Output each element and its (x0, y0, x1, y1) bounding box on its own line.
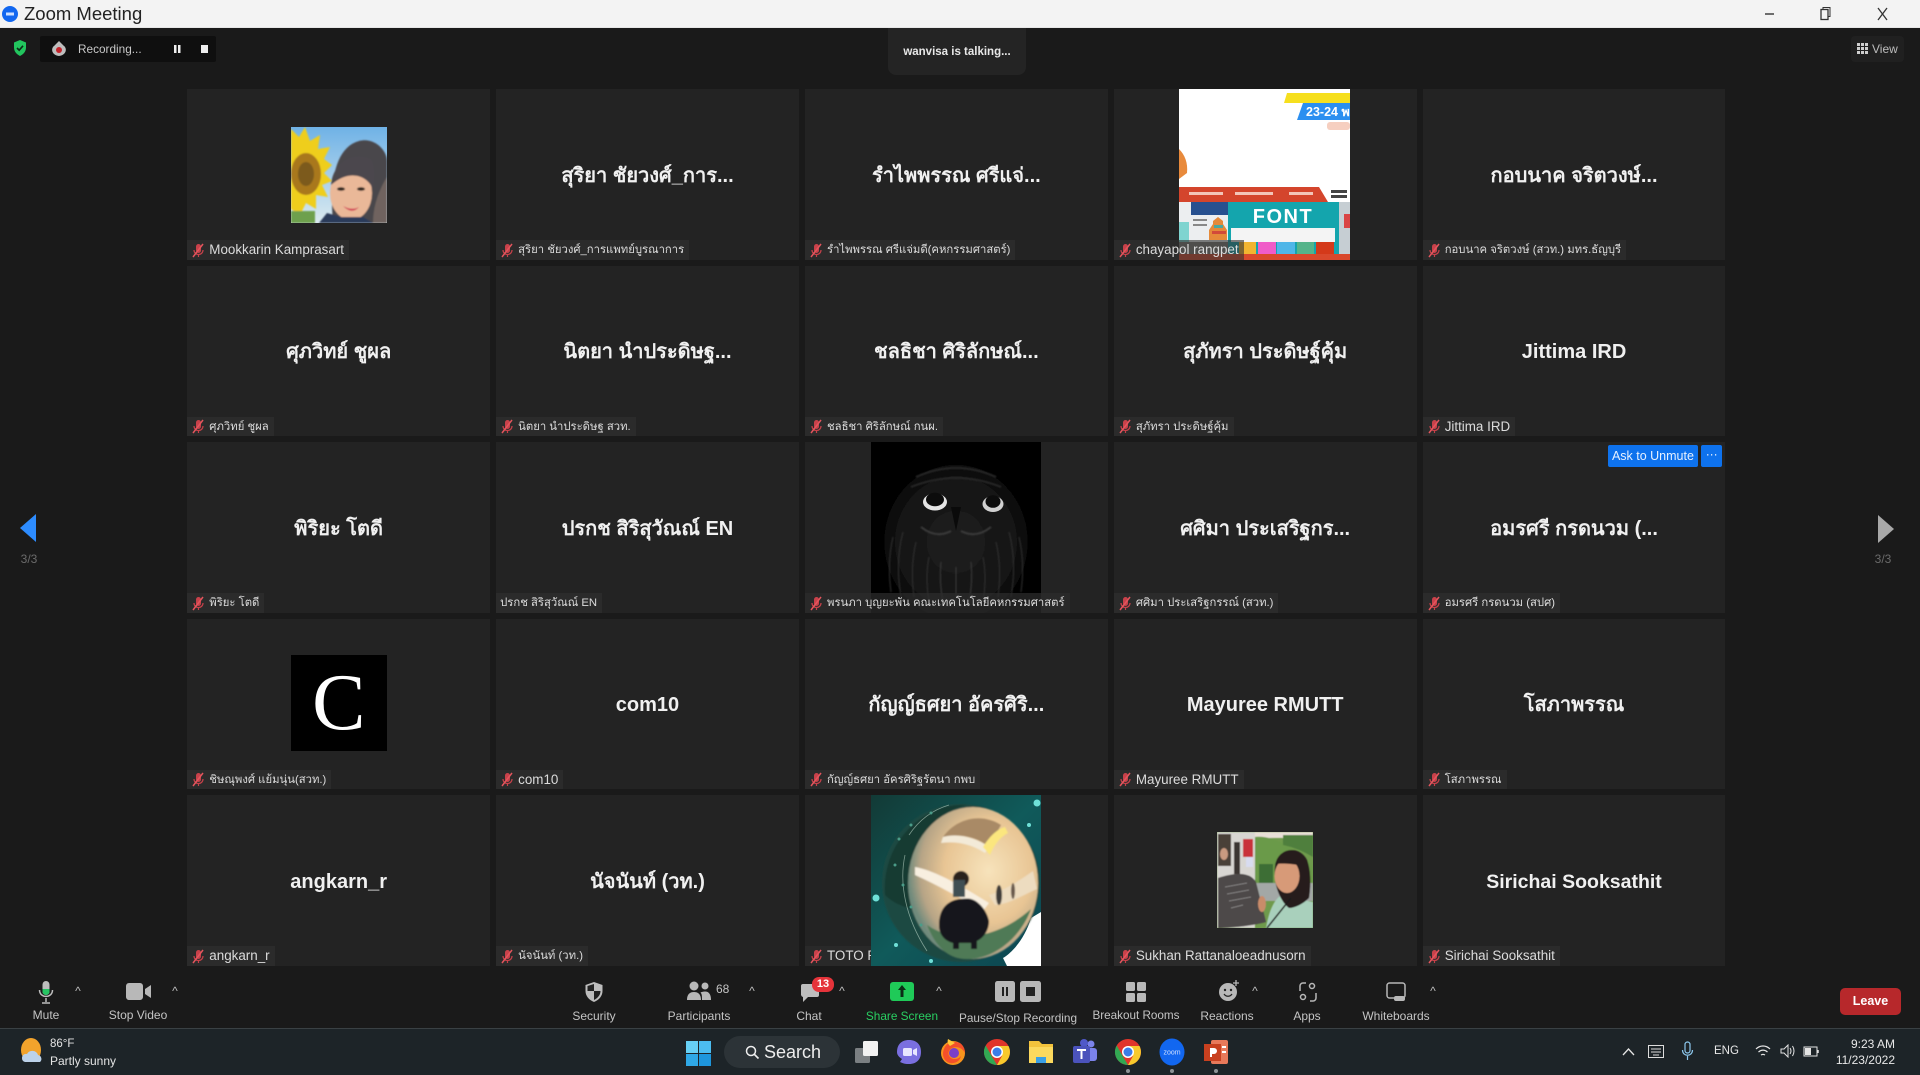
name label (1423, 240, 1626, 260)
participant tile: โสภาพรรณ (1423, 618, 1725, 789)
participant tile: ปรกช (496, 442, 799, 613)
right page count: 3/3 (1875, 552, 1891, 566)
window title: Zoom Meeting (24, 3, 142, 24)
icon: file explorer (1029, 1041, 1053, 1063)
name label (496, 770, 563, 789)
chat badge (812, 977, 834, 992)
owl photo (871, 442, 1041, 613)
name label: นัจนันท์ (วท.) (518, 950, 583, 962)
display name: โสภาพรรณ (1524, 694, 1624, 716)
name label (187, 417, 274, 436)
name label: ชลธิชา ศิริลักษณ์ กนผ. (827, 421, 938, 433)
display name: กัญญ์ธศยา อัครศิริ... (868, 694, 1044, 716)
name label (187, 770, 331, 789)
name label: พิริยะ โตดี (209, 597, 259, 609)
icon: battery (1803, 1044, 1820, 1058)
participant tile: TOTO (805, 795, 1108, 966)
icon: partly sunny (21, 1038, 42, 1062)
language: ENG (1714, 1045, 1739, 1057)
more options button (1701, 445, 1722, 467)
name label: ปรกช สิริสุวัณณ์ EN (500, 597, 597, 609)
name label (1423, 946, 1560, 966)
toolbar: participants: 68 (716, 982, 729, 996)
name label: รำไพพรรณ ศรีแจ่มดี(คหกรรมศาสตร์) (827, 244, 1010, 256)
name label (1114, 593, 1278, 613)
icon: windows start (686, 1041, 711, 1066)
toolbar: chat: Chat (796, 1008, 822, 1022)
toolbar: whiteboards: Whiteboards (1362, 1008, 1430, 1022)
toolbar: security: Security (572, 1008, 616, 1022)
participant tile: ศศิมา (1114, 442, 1417, 613)
chevron: chat options: ^ (839, 984, 845, 998)
name label: นิตยา นำประดิษฐ สวท. (518, 421, 631, 433)
title bar (0, 0, 1920, 28)
name label: Jittima IRD (1445, 419, 1510, 434)
name label: Sukhan Rattanaloeadnusorn (1136, 948, 1306, 963)
participant tile: อมรศรี (1423, 442, 1725, 613)
chevron: participants options: ^ (749, 984, 755, 998)
search box (724, 1036, 840, 1068)
display name: รำไพพรรณ ศรีแจ่... (872, 164, 1041, 186)
toolbar: pause/stop recording: Pause/Stop Recording (959, 1010, 1077, 1024)
participant tile: สุภัทรา (1114, 266, 1417, 436)
name label: Mayuree RMUTT (1136, 772, 1239, 787)
ask to unmute button (1608, 445, 1698, 467)
name label: พรนภา บุญยะพัน คณะเทคโนโลยีคหกรรมศาสตร์ (827, 597, 1065, 609)
poster image (1179, 89, 1350, 260)
name label (805, 417, 943, 436)
name label (805, 770, 980, 789)
icon: zoom running: zoom (1163, 1050, 1181, 1056)
name label (496, 417, 636, 436)
display name: นิตยา นำประดิษฐ... (563, 341, 732, 363)
icon: teams (1073, 1039, 1097, 1063)
name label: chayapol rangpet (1136, 242, 1239, 257)
name label (805, 593, 1070, 613)
participant tile: ศุภวิทย์ (187, 266, 490, 436)
participant tile: Jittima (1423, 266, 1725, 436)
name label (187, 946, 275, 966)
icon: powerpoint running (1204, 1040, 1228, 1064)
name label (1114, 417, 1234, 436)
toolbar: breakout rooms (1092, 982, 1180, 1022)
icon: zoom running (1160, 1038, 1184, 1066)
name label: สุภัทรา ประดิษฐ์คุ้ม (1136, 421, 1229, 433)
participant tile: สุริยา (496, 89, 799, 260)
icon: keyboard (1648, 1045, 1664, 1058)
name label: ศศิมา ประเสริฐกรรณ์ (สวท.) (1136, 597, 1273, 609)
toolbar: chat (796, 977, 834, 1022)
recording label: Recording... (78, 42, 142, 56)
name label (187, 593, 264, 613)
name label (1423, 770, 1507, 789)
display name: ศศิมา ประเสริฐกร... (1180, 518, 1350, 540)
icon: chrome running (1115, 1039, 1141, 1065)
participant tile: ชลธิชา (805, 266, 1108, 436)
name label (805, 946, 883, 966)
participant tile: รำไพพรรณ (805, 89, 1108, 260)
participant tile: chayapol (1114, 89, 1417, 260)
display name: ปรกช สิริสุวัณณ์ EN (562, 518, 733, 540)
display name: angkarn_r (290, 870, 387, 892)
icon: chrome (984, 1039, 1010, 1065)
display name: ศุภวิทย์ ชูผล (286, 341, 391, 363)
name label: กัญญ์ธศยา อัครศิริฐรัตนา กพบ (827, 774, 975, 786)
chat badge: 13 (817, 978, 829, 990)
display name: อมรศรี กรดนวม (... (1490, 518, 1658, 540)
display name: com10 (616, 694, 679, 716)
icon: magnifier (746, 1046, 759, 1060)
chevron: video options: ^ (172, 984, 178, 998)
left page arrow (20, 514, 36, 542)
running app dots (1126, 1069, 1174, 1073)
toolbar: stop video (109, 983, 167, 1022)
name label: กอบนาค จริตวงษ์ (สวท.) มทร.ธัญบุรี (1445, 244, 1621, 256)
toolbar: whiteboards (1362, 982, 1430, 1022)
name label (496, 946, 588, 966)
name label: อมรศรี กรดนวม (สปศ) (1445, 597, 1555, 609)
participant tile: Sukhan (1114, 795, 1417, 966)
icon: microphone (1681, 1041, 1694, 1061)
icon: recording (52, 41, 66, 56)
icon: view grid (1857, 43, 1868, 54)
name label: TOTO P. (827, 948, 878, 963)
icon: task view (855, 1041, 878, 1063)
participant tile: กอบนาค (1423, 89, 1725, 260)
right page arrow (1878, 515, 1894, 543)
toolbar: mute (33, 981, 59, 1022)
toolbar: mute: Mute (33, 1008, 59, 1022)
icon: tray chevron (1622, 1048, 1634, 1056)
name label: ชิษณุพงศ์ แย้มนุ่น(สวท.) (209, 774, 326, 786)
ask to unmute button: Ask to Unmute (1612, 449, 1694, 463)
talking indicator (888, 28, 1026, 75)
taskbar (0, 1028, 1920, 1075)
name label (187, 240, 349, 260)
name label (805, 240, 1015, 260)
search box: Search (764, 1042, 821, 1062)
toolbar: participants: Participants (668, 1008, 730, 1022)
participant tile: นิตยา (496, 266, 799, 436)
display name: สุภัทรา ประดิษฐ์คุ้ม (1183, 341, 1347, 363)
name label: Mookkarin Kamprasart (209, 242, 344, 257)
toolbar: breakout rooms: Breakout Rooms (1092, 1008, 1180, 1022)
participant tile: angkarn_r (187, 795, 490, 966)
view button (1851, 36, 1904, 62)
temperature: 86°F (50, 1038, 74, 1050)
toolbar: share screen: Share Screen (866, 1008, 938, 1022)
participant tile: นัจนันท์ (496, 795, 799, 966)
chevron: reactions options: ^ (1252, 984, 1258, 998)
name label: angkarn_r (209, 948, 270, 963)
avatar: letter C: C (312, 659, 365, 747)
clock date: 11/23/2022 (1836, 1053, 1895, 1067)
participant tile: Mayuree (1114, 618, 1417, 789)
icon: firefox (941, 1039, 965, 1065)
view button: View (1872, 42, 1898, 56)
more options button: ··· (1706, 447, 1718, 461)
name label: com10 (518, 772, 558, 787)
participant tile: พรนภา (805, 442, 1108, 613)
display name: Jittima IRD (1522, 341, 1626, 363)
name label (496, 240, 689, 260)
icon: meet (897, 1040, 921, 1064)
name label (1114, 770, 1244, 789)
toolbar: apps: Apps (1293, 1008, 1321, 1022)
toolbar: pause/stop recording (959, 981, 1077, 1024)
running app dot (1214, 1069, 1218, 1073)
participant tile: Mookkarin (187, 89, 490, 260)
icon: pause and stop (174, 45, 208, 53)
name label (1114, 946, 1311, 966)
name label (1423, 417, 1515, 436)
photo: woman holding book (1217, 832, 1313, 928)
name label (1423, 593, 1560, 613)
name label: Sirichai Sooksathit (1445, 948, 1555, 963)
display name: Mayuree RMUTT (1187, 694, 1344, 716)
name label: โสภาพรรณ (1445, 774, 1502, 786)
avatar: letter C (291, 655, 387, 751)
icon: security shield (14, 40, 26, 56)
left page count: 3/3 (21, 552, 37, 566)
photo: mirror ball selfie (871, 795, 1041, 966)
icon: wifi (1755, 1044, 1771, 1058)
display name: ชลธิชา ศิริลักษณ์... (874, 341, 1039, 363)
chevron: share options: ^ (936, 984, 942, 998)
toolbar: security (572, 982, 616, 1022)
display name: นัจนันท์ (วท.) (590, 870, 705, 892)
chevron: mute options: ^ (75, 984, 81, 998)
weather widget (21, 1038, 116, 1068)
toolbar: apps (1293, 982, 1321, 1022)
name label: ศุภวิทย์ ชูผล (209, 421, 269, 433)
toolbar: participants (668, 982, 730, 1022)
window controls (1765, 7, 1888, 20)
toolbar: reactions: Reactions (1200, 1008, 1254, 1022)
toolbar: share screen (866, 982, 938, 1022)
participant tile: พิริยะ (187, 442, 490, 613)
photo: woman with sunflower (291, 127, 387, 223)
name label (496, 593, 602, 613)
display name: พิริยะ โตดี (294, 518, 383, 540)
toolbar: stop video: Stop Video (109, 1008, 167, 1022)
participant tile: com10 (496, 618, 799, 789)
chevron: whiteboards options: ^ (1430, 984, 1436, 998)
recording status (40, 36, 216, 62)
conditions: Partly sunny (50, 1054, 116, 1068)
name label: สุริยา ชัยวงศ์_การแพทย์บูรณาการ (518, 244, 684, 256)
talking indicator: wanvisa is talking... (903, 46, 1011, 58)
icon: zoom logo (2, 6, 18, 22)
participant tile: Sirichai (1423, 795, 1725, 966)
leave button (1840, 988, 1901, 1015)
participant tile: ชิษณุพงศ์ (187, 618, 490, 789)
display name: สุริยา ชัยวงศ์_การ... (561, 164, 734, 186)
leave button: Leave (1853, 994, 1888, 1008)
poster image: FONT (1253, 206, 1314, 228)
system tray (1622, 1037, 1895, 1067)
name label (1114, 240, 1244, 260)
display name: Sirichai Sooksathit (1486, 870, 1662, 892)
icon: volume (1780, 1044, 1796, 1058)
participant tile: กัญญ์ธศยา (805, 618, 1108, 789)
clock time: 9:23 AM (1851, 1037, 1895, 1051)
toolbar: reactions (1200, 980, 1254, 1022)
display name: กอบนาค จริตวงษ์... (1491, 164, 1658, 186)
